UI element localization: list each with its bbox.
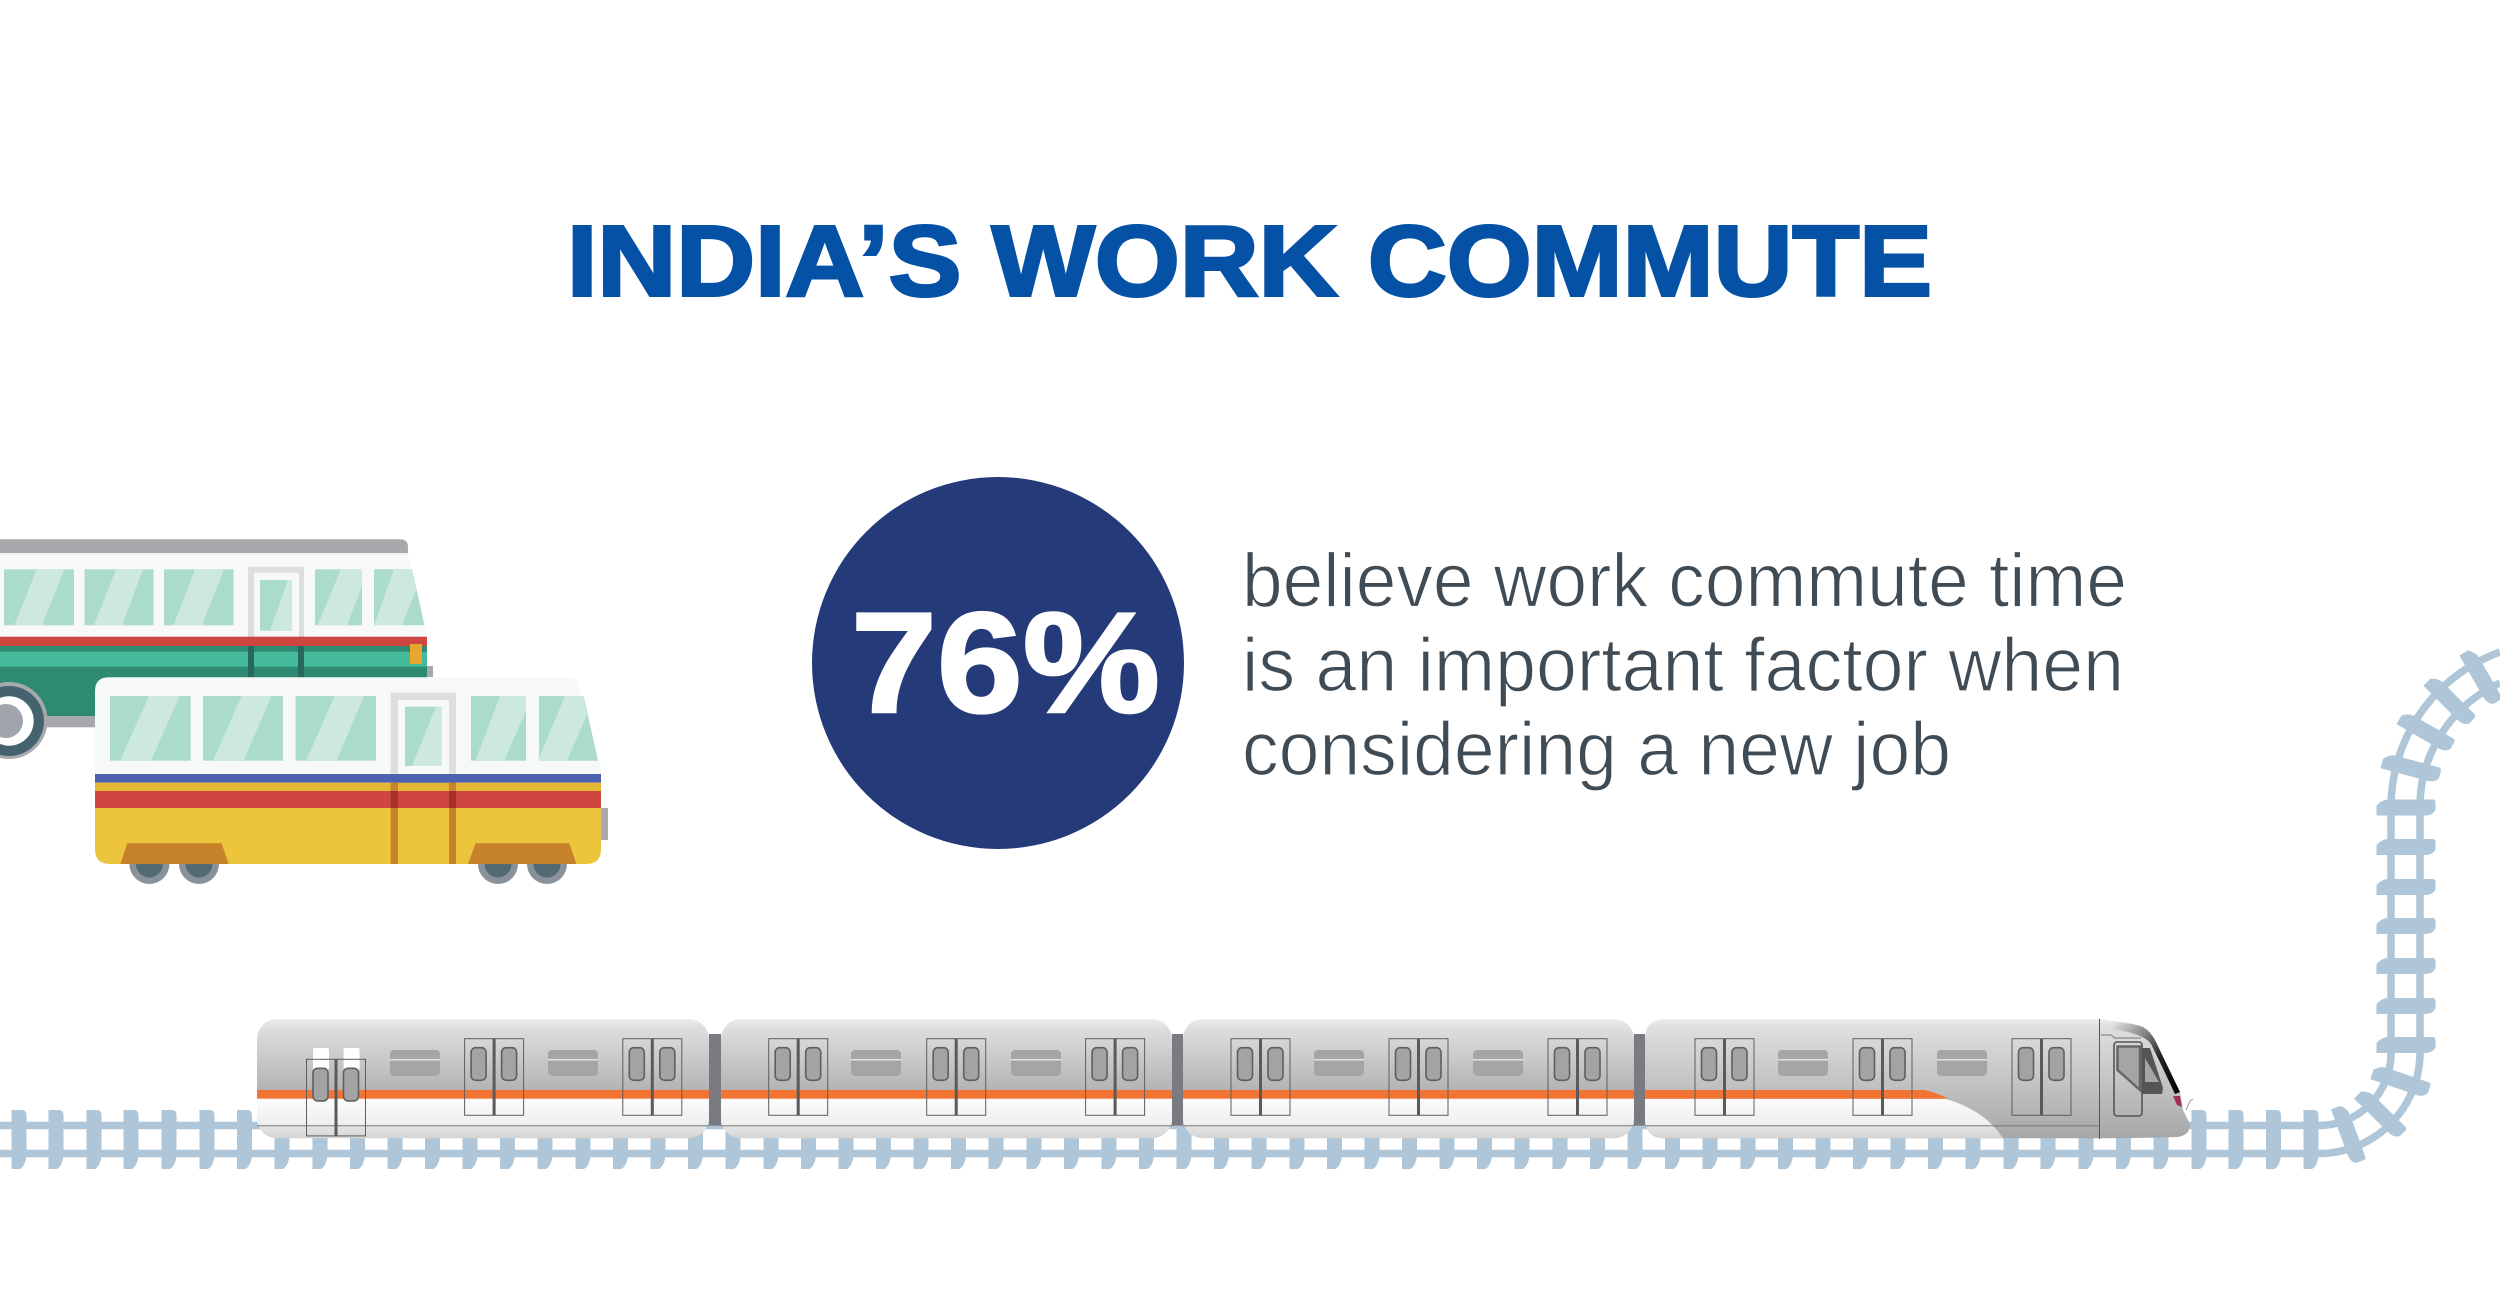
yellow bus wheel arches (120, 843, 576, 864)
yellow bus bumper (601, 808, 608, 840)
statistic description: is an important factor when (1242, 623, 2124, 708)
straight track ties (12, 1110, 2318, 1169)
cab tail light (2173, 1096, 2182, 1107)
green bus indicator light (410, 644, 422, 664)
statistic value: 76% (851, 584, 1160, 743)
metro train (257, 1019, 2193, 1139)
train car 2 (721, 1019, 1172, 1138)
yellow bus wheels (129, 844, 567, 884)
train lead car (1645, 1019, 2193, 1139)
lower curve ties (2331, 1064, 2431, 1165)
cab windscreen (2142, 1048, 2163, 1094)
lead car white skirt (1645, 1099, 2003, 1138)
train car 3 (1183, 1019, 1634, 1138)
statistic description (1242, 538, 2127, 792)
upper curve ties (2381, 648, 2500, 784)
green bus bumper (427, 666, 433, 677)
yellow bus door (391, 693, 456, 864)
track rails (0, 652, 2500, 1154)
railway track (0, 648, 2500, 1169)
title: INDIA’S WORK COMMUTE (567, 206, 1932, 318)
cab coupler wire (2186, 1099, 2193, 1110)
cab door (2114, 1042, 2142, 1116)
vertical track ties (2376, 800, 2436, 1053)
green bus windows (4, 569, 424, 625)
icon: yellow bus (95, 677, 608, 884)
yellow bus windows (110, 696, 598, 761)
lead car orange stripe (1645, 1090, 1948, 1099)
icon: green bus (0, 539, 433, 759)
statistic description: considering a new job (1242, 707, 1951, 792)
train car 1 (257, 1019, 709, 1138)
green bus wheel (0, 682, 48, 759)
train connectors (709, 1034, 1645, 1126)
cab front stripe (2112, 1022, 2180, 1094)
statistic description: believe work commute time (1242, 538, 2127, 624)
green bus door (248, 567, 304, 716)
statistic circle: 76% (812, 477, 1184, 849)
